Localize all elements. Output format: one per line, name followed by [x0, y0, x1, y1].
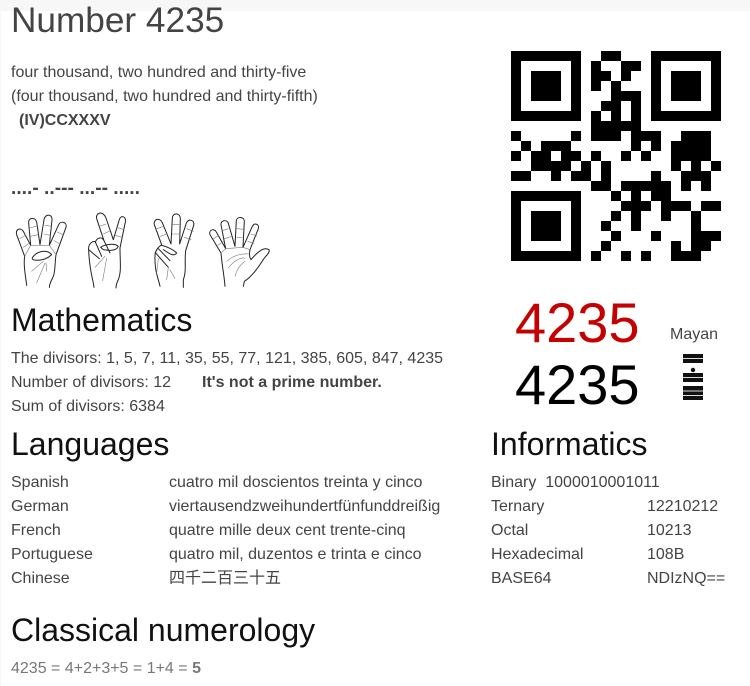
informatics table: Binary 1000010001011 — [491, 474, 660, 491]
informatics table: Hexadecimal — [491, 546, 583, 563]
hand two — [89, 213, 126, 288]
languages table: 四千二百三十五 — [169, 570, 281, 587]
black number: 4235 — [515, 353, 640, 416]
hand five — [210, 217, 269, 286]
Mayan label: Mayan — [670, 326, 718, 343]
informatics table: 10213 — [647, 522, 692, 539]
informatics table: 108B — [647, 546, 684, 563]
icon: sign language hands — [16, 212, 270, 288]
languages table: cuatro mil doscientos treinta y cinco — [169, 474, 422, 491]
title: Number 4235 — [11, 1, 224, 40]
languages table: Spanish — [11, 474, 69, 491]
QR modules — [511, 51, 721, 261]
mathematics facts: Number of divisors: 12 — [11, 374, 171, 391]
languages table — [11, 474, 440, 587]
languages table: viertausendzweihundertfünfunddreißig — [169, 498, 440, 515]
numerology calculation: 4235 = 4+2+3+5 = 1+4 = 5 — [11, 660, 201, 677]
number names and roman numeral: (IV)CCXXXV — [19, 112, 111, 129]
heading: Classical numerology: Classical numerology — [11, 612, 315, 648]
heading: Languages: Languages — [11, 426, 169, 462]
informatics table — [491, 474, 725, 587]
heading: Informatics: Informatics — [491, 426, 647, 462]
number names and roman numeral: (four thousand, two hundred and thirty-fifth) — [11, 88, 318, 105]
morse code: ....- ..--- ...-- ..... — [11, 178, 140, 199]
QR code — [511, 51, 721, 261]
heading: Mathematics: Mathematics — [11, 302, 192, 338]
informatics table: NDIzNQ== — [647, 570, 725, 587]
languages table: quatro mil, duzentos e trinta e cinco — [169, 546, 422, 563]
informatics table: BASE64 — [491, 570, 551, 587]
languages table: quatre mille deux cent trente-cinq — [169, 522, 406, 539]
mathematics facts: It's not a prime number. — [202, 374, 382, 391]
languages table: Chinese — [11, 570, 70, 587]
informatics table: 12210212 — [647, 498, 718, 515]
informatics table: Ternary — [491, 498, 544, 515]
mathematics facts: The divisors: 1, 5, 7, 11, 35, 55, 77, 121, 385, 605, 847, 4235 — [11, 350, 443, 367]
hand four — [16, 215, 66, 287]
number names and roman numeral — [11, 64, 318, 129]
languages table: French — [11, 522, 61, 539]
languages table: Portuguese — [11, 546, 93, 563]
mathematics facts — [11, 350, 443, 415]
mathematics facts: Sum of divisors: 6384 — [11, 398, 165, 415]
number names and roman numeral: four thousand, two hundred and thirty-five — [11, 64, 306, 81]
languages table: German — [11, 498, 69, 515]
informatics table: Octal — [491, 522, 528, 539]
icon: Mayan numeral — [683, 354, 703, 400]
bars and dot — [683, 354, 703, 400]
hand three — [154, 214, 194, 287]
red number: 4235 — [515, 291, 640, 354]
